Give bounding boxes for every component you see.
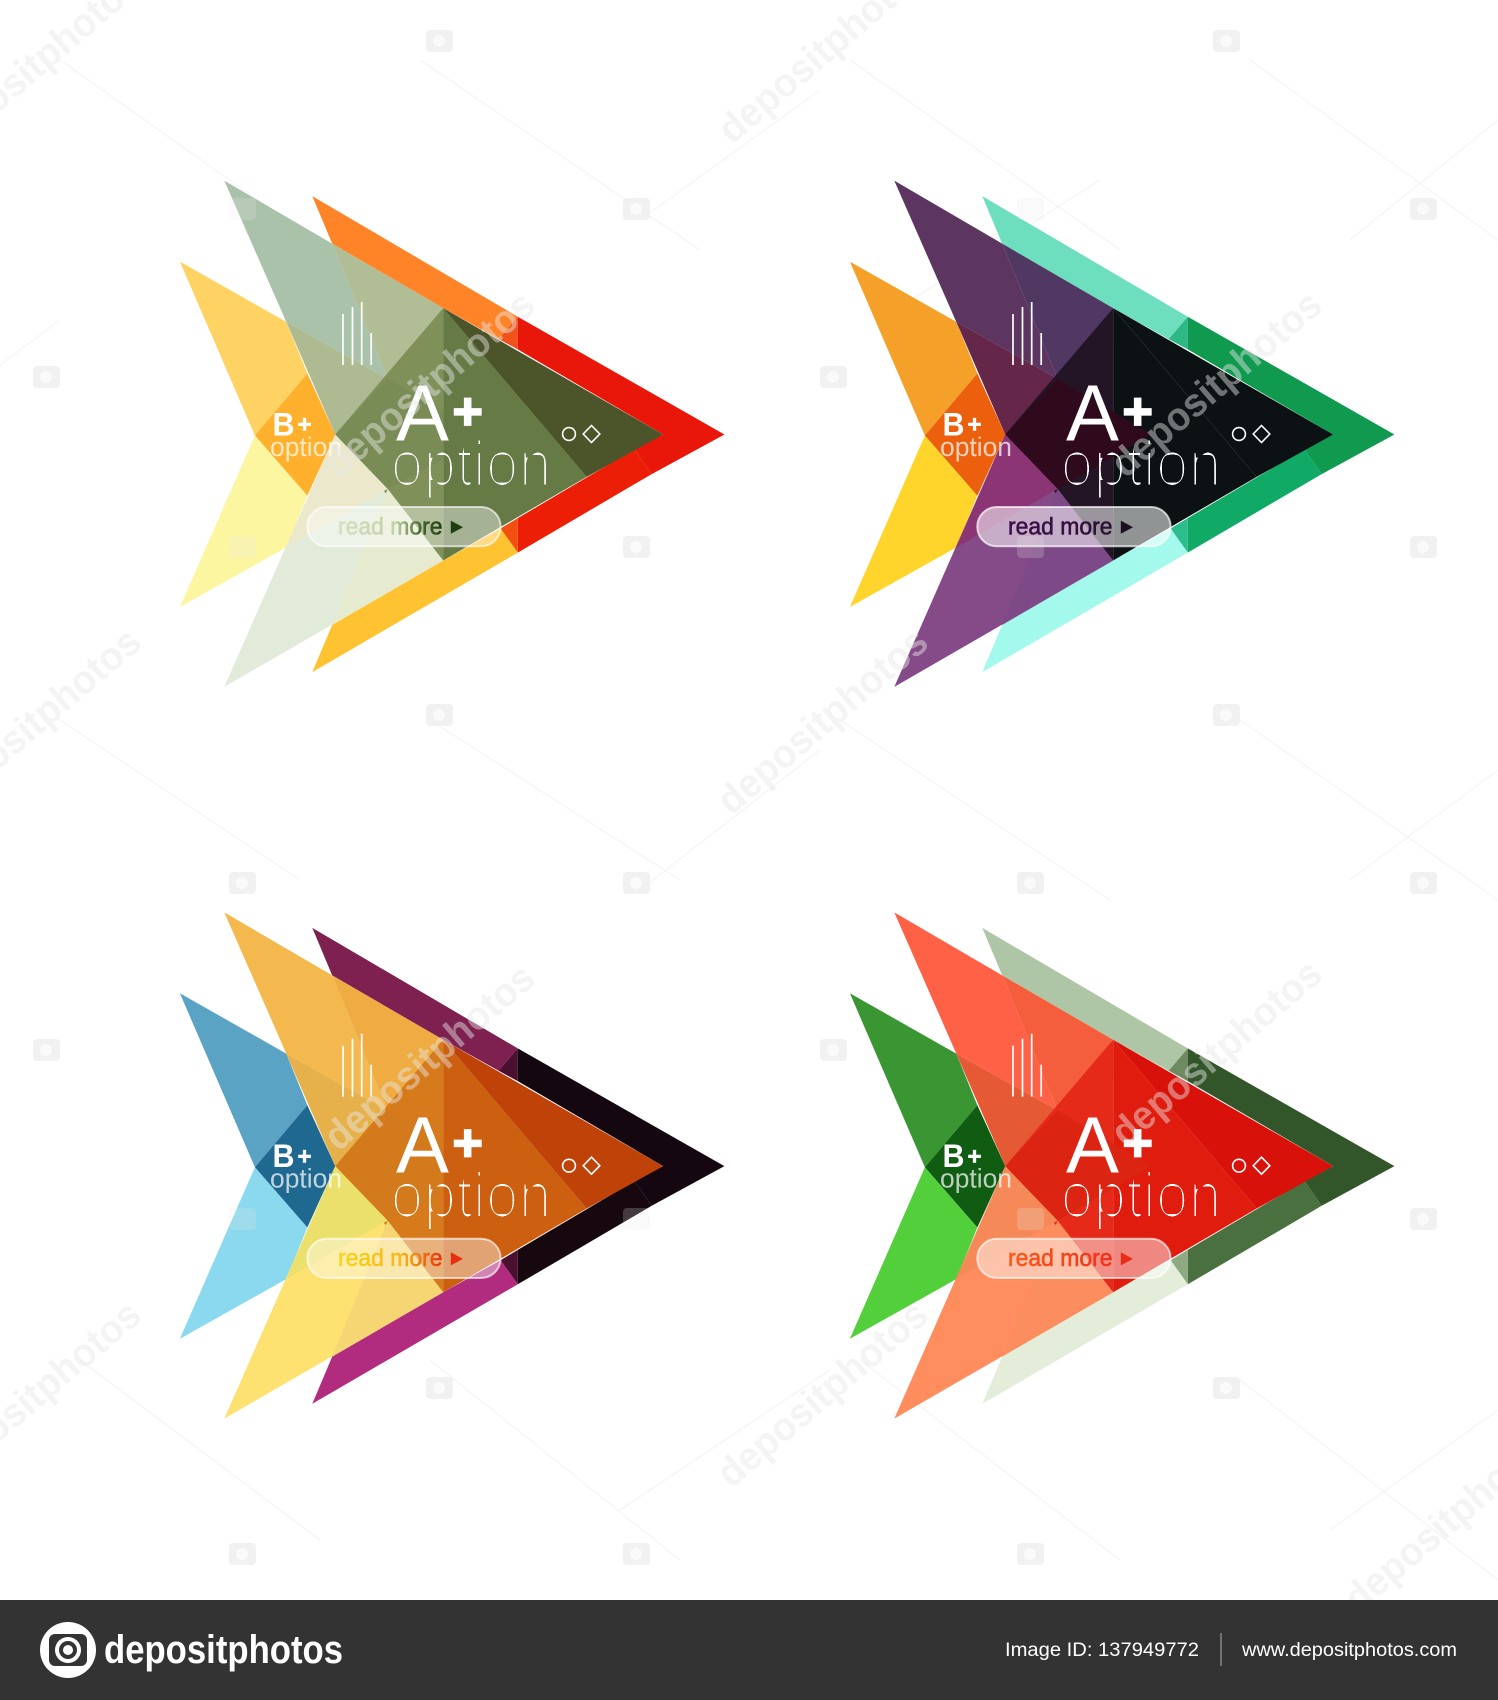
small chevron (180, 993, 335, 1339)
small chevron (850, 993, 1005, 1339)
icons: circle and diamond (1233, 1157, 1270, 1174)
main label: A+ option (1060, 369, 1222, 500)
small label: B+ option (940, 406, 1012, 462)
main label: A+ option (1060, 1100, 1222, 1231)
main label: A+ option: A (396, 1100, 449, 1189)
main label: A+ option: A (396, 369, 449, 458)
button: read more (307, 507, 501, 546)
watermark: depositphotos text: depositphotos (709, 1292, 936, 1496)
bars icon (343, 1034, 371, 1097)
small label: B+ option: + (968, 412, 982, 439)
main triangle (224, 181, 663, 687)
small label: B+ option: + (298, 412, 312, 439)
panel: arrow bottom left (amber, magenta, blue) (180, 912, 724, 1419)
button: read more: read more (338, 514, 442, 540)
small label: B+ option (270, 1138, 342, 1194)
icons: circle and diamond (563, 1157, 600, 1174)
website url: www.depositphotos.com (1241, 1640, 1457, 1661)
small label: B+ option: option (940, 1164, 1012, 1194)
small label: B+ option (940, 1138, 1012, 1194)
small label: B+ option: + (968, 1143, 982, 1170)
panel: arrow top left (sage, orange, red) (180, 181, 724, 687)
shapes: arrow facets (180, 181, 724, 687)
small label: B+ option: B (942, 1138, 964, 1174)
main triangle (224, 912, 663, 1419)
button: read more (307, 1239, 501, 1278)
small label: B+ option (270, 406, 342, 462)
image id: Image ID: 137949772 (1005, 1640, 1199, 1661)
footer bar (0, 1600, 1498, 1700)
main label: A+ option: A (1066, 1100, 1119, 1189)
small label: B+ option: option (270, 1164, 342, 1194)
button: read more: read more (338, 1245, 442, 1272)
main label: A+ option: + (1122, 383, 1153, 441)
watermark: depositphotos text: depositphotos (316, 282, 543, 486)
button: read more (977, 1239, 1171, 1278)
main label: A+ option (390, 1100, 552, 1231)
main label: A+ option (390, 369, 552, 500)
main label: A+ option: option (1060, 1161, 1222, 1231)
main label: A+ option: + (1122, 1115, 1153, 1173)
main triangle (894, 181, 1333, 687)
icon: camera logo (40, 1622, 96, 1678)
small label: B+ option: option (270, 432, 342, 462)
main label: A+ option: option (390, 430, 552, 500)
watermark: depositphotos text: depositphotos (1103, 282, 1330, 486)
small label: B+ option: B (272, 1138, 294, 1174)
logo wordmark: depositphotos (104, 1628, 343, 1672)
bars icon (343, 302, 371, 365)
back arrow (312, 928, 724, 1404)
back arrow (982, 196, 1394, 672)
watermark: depositphotos text: depositphotos (1103, 951, 1330, 1155)
watermark: depositphotos text: depositphotos (316, 955, 543, 1159)
shapes: arrow facets (180, 912, 724, 1419)
small label: B+ option: + (298, 1143, 312, 1170)
panel: arrow bottom right (red, sage, green) (850, 912, 1394, 1419)
watermark: cameras over arrows (229, 198, 1044, 1230)
main label: A+ option: A (1066, 369, 1119, 458)
main label: A+ option: + (452, 383, 483, 441)
icons: circle and diamond (1233, 426, 1270, 442)
small label: B+ option: B (942, 406, 964, 442)
small chevron (850, 262, 1005, 607)
small label: B+ option: option (940, 432, 1012, 462)
main label: A+ option: option (1060, 430, 1222, 500)
shapes: arrow facets (850, 912, 1394, 1419)
main triangle (894, 912, 1333, 1419)
shapes: arrow facets (850, 181, 1394, 687)
small chevron (180, 262, 335, 607)
button: read more: read more (1008, 1245, 1112, 1272)
small label: B+ option: B (272, 406, 294, 442)
main label: A+ option: + (452, 1115, 483, 1173)
button: read more (977, 507, 1171, 546)
button: read more: read more (1008, 514, 1112, 540)
bars icon (1013, 302, 1041, 365)
bars icon (1013, 1034, 1041, 1097)
back arrow (312, 196, 724, 672)
panel: arrow top right (purple, teal, green) (850, 181, 1394, 687)
back arrow (982, 928, 1394, 1404)
main label: A+ option: option (390, 1161, 552, 1231)
watermark: depositphotos text: depositphotos (709, 619, 936, 823)
icons: circle and diamond (563, 426, 600, 442)
